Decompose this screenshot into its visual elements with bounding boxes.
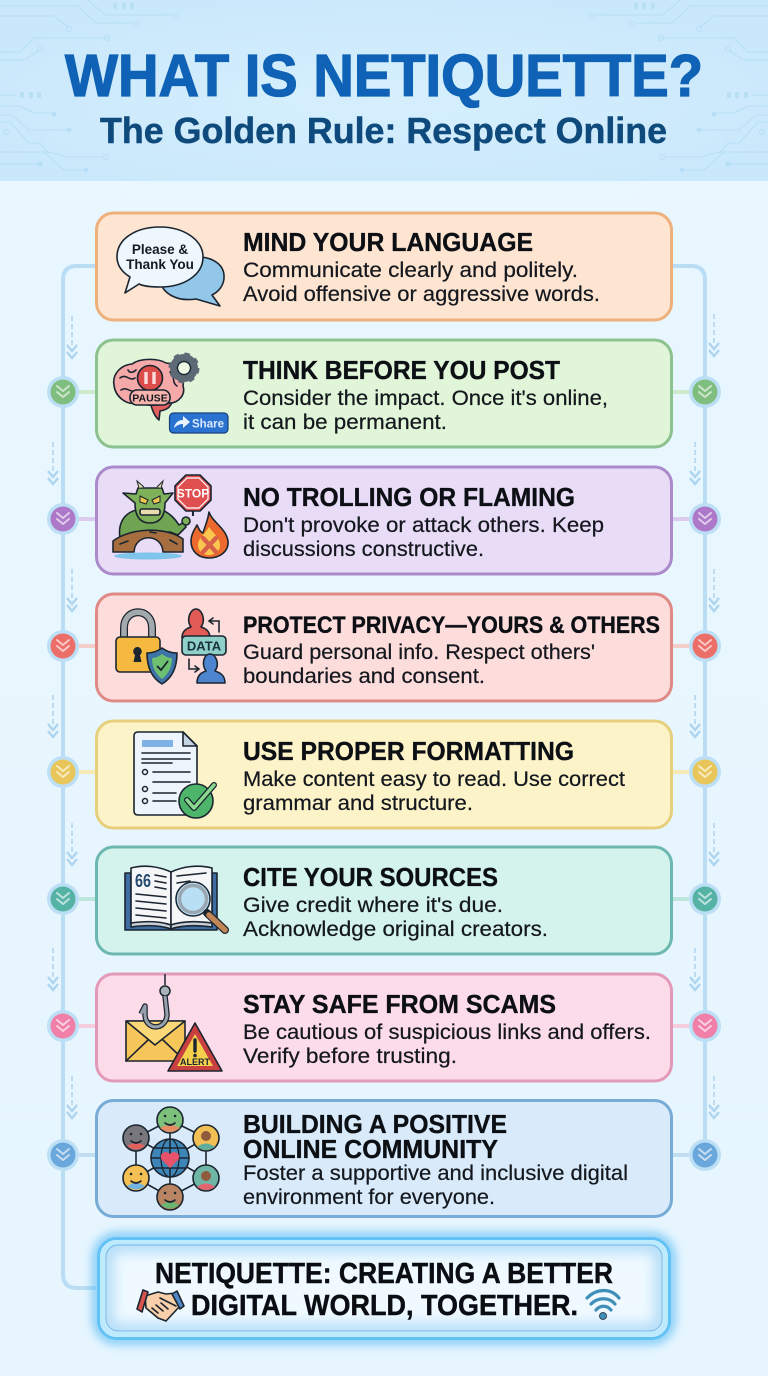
- icon: community network around a globe: [123, 1107, 219, 1210]
- description: Verify before trusting.: [243, 1044, 457, 1068]
- description: boundaries and consent.: [243, 664, 485, 688]
- icon: padlock, shield and data exchange: [116, 609, 226, 684]
- subtitle: The Golden Rule: Respect Online: [100, 110, 667, 151]
- icon: phishing hook, envelope and alert: [126, 974, 222, 1071]
- heading: BUILDING A POSITIVE: [243, 1109, 507, 1139]
- panel: stay safe from scams: [96, 974, 672, 1081]
- closing message: DIGITAL WORLD, TOGETHER.: [191, 1290, 578, 1322]
- icon: open book with magnifier: 66: [135, 871, 151, 891]
- description: Give credit where it's due.: [243, 893, 503, 917]
- panel: building a positive online community: [96, 1100, 672, 1216]
- panel: cite your sources: [96, 847, 672, 954]
- icon: brain, gear and share button: [114, 355, 228, 433]
- heading: MIND YOUR LANGUAGE: [243, 227, 533, 257]
- heading: STAY SAFE FROM SCAMS: [243, 989, 556, 1019]
- timeline nodes and connectors: [47, 376, 721, 1171]
- icon: troll on bridge, stop sign and flame: STOP: [177, 486, 209, 500]
- panel: mind your language: [96, 213, 672, 320]
- heading: USE PROPER FORMATTING: [243, 736, 574, 766]
- heading: ONLINE COMMUNITY: [243, 1134, 498, 1164]
- icon: document with checkmark: [134, 732, 214, 818]
- icon: wifi signal: [587, 1290, 619, 1320]
- right timeline rail: [672, 266, 705, 1155]
- icon: handshake: [137, 1290, 184, 1321]
- icon: padlock, shield and data exchange: DATA: [187, 638, 222, 654]
- icon: open book with magnifier: [125, 866, 225, 930]
- icon: speech bubbles: Please &: [132, 242, 188, 257]
- description: it can be permanent.: [243, 410, 447, 434]
- description: grammar and structure.: [243, 791, 473, 815]
- icon: troll on bridge, stop sign and flame: [113, 475, 228, 560]
- icon: brain, gear and share button: Share: [192, 418, 224, 430]
- panel: closing callout: [97, 1237, 671, 1340]
- icon: speech bubbles: Thank You: [126, 257, 194, 272]
- heading: CITE YOUR SOURCES: [243, 862, 498, 892]
- icon: phishing hook, envelope and alert: ALERT: [180, 1057, 210, 1067]
- heading: PROTECT PRIVACY—YOURS & OTHERS: [243, 612, 660, 639]
- panel: protect privacy: [96, 594, 672, 701]
- description: Communicate clearly and politely.: [243, 258, 578, 282]
- heading: THINK BEFORE YOU POST: [243, 355, 560, 385]
- description: discussions constructive.: [243, 537, 484, 561]
- description: Avoid offensive or aggressive words.: [243, 282, 600, 306]
- description: Guard personal info. Respect others': [243, 640, 595, 664]
- left timeline rail: [63, 266, 96, 1288]
- description: Acknowledge original creators.: [243, 917, 548, 941]
- icon: brain, gear and share button: PAUSE: [132, 392, 168, 404]
- description: Foster a supportive and inclusive digital: [243, 1161, 628, 1185]
- heading: NO TROLLING OR FLAMING: [243, 482, 575, 512]
- icon: speech bubbles: [117, 227, 224, 306]
- closing message: NETIQUETTE: CREATING A BETTER: [155, 1258, 613, 1290]
- description: Don't provoke or attack others. Keep: [243, 513, 604, 537]
- panel: think before you post: [96, 340, 672, 447]
- dashed flow arrows: [48, 314, 719, 1118]
- title: WHAT IS NETIQUETTE?: [65, 43, 703, 109]
- panel: no trolling or flaming: [96, 467, 672, 574]
- description: Consider the impact. Once it's online,: [243, 386, 608, 410]
- description: Make content easy to read. Use correct: [243, 767, 625, 791]
- header band: [0, 0, 768, 181]
- description: Be cautious of suspicious links and offers.: [243, 1020, 651, 1044]
- panel: use proper formatting: [96, 721, 672, 828]
- description: environment for everyone.: [243, 1185, 495, 1209]
